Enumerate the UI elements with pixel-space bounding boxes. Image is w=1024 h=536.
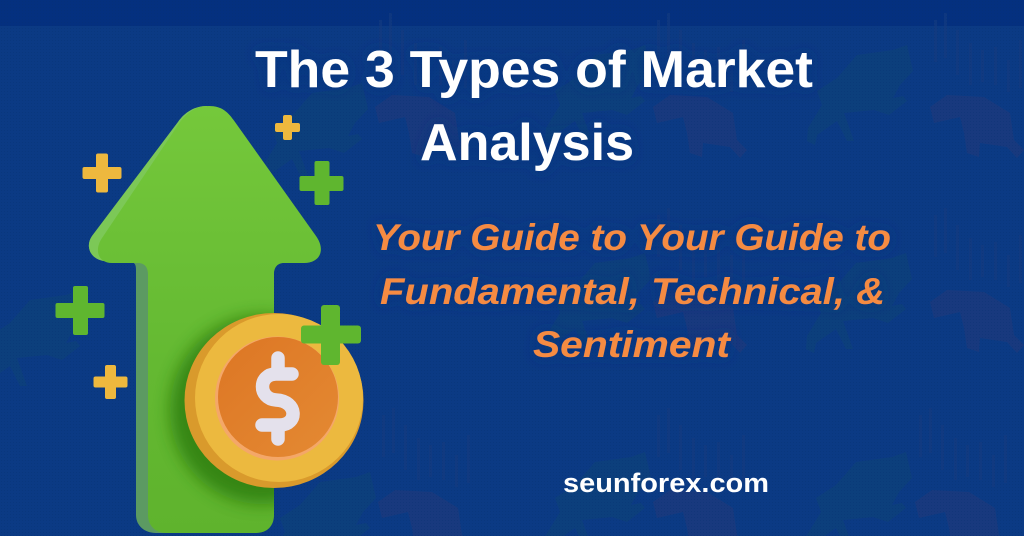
icon: large green plus on coin [301,305,361,365]
subtitle: Sentiment [533,324,732,365]
icon: green up arrow [88,106,321,533]
icon: small yellow plus top [275,115,300,140]
shadow cast by coin [163,308,274,511]
website: seunforex.com [563,468,769,498]
icon: dollar sign [262,358,293,439]
icon: green plus top right [300,161,344,205]
title [255,41,813,172]
icon: green plus left [56,286,104,335]
subtitle: Fundamental, Technical, & [380,271,885,312]
subtitle: Your Guide to Your Guide to [373,217,891,258]
title: The 3 Types of Market [255,41,813,99]
title: Analysis [420,114,634,172]
icon: gold dollar coin [184,313,364,488]
subtitle [373,217,891,365]
icon: yellow plus bottom left [94,365,128,399]
icon: yellow plus top left [82,154,122,192]
